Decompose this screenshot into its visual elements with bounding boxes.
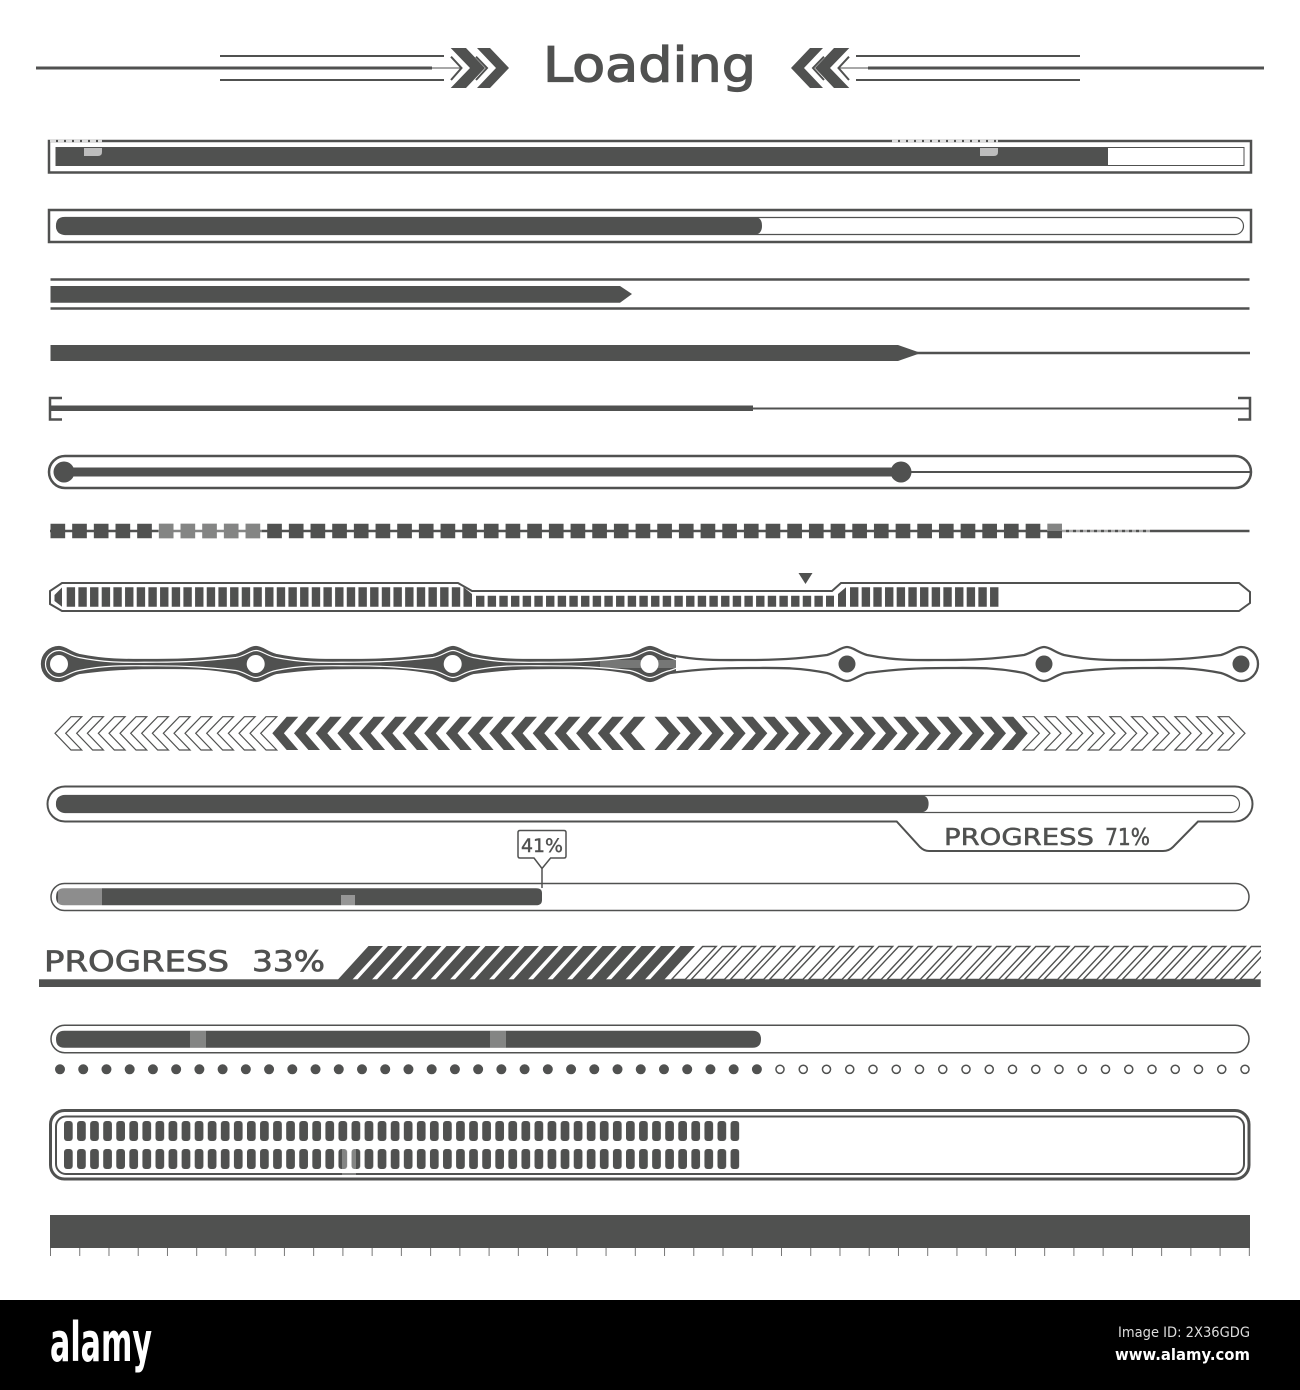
progress bar 6: capsule with round knobs (49, 456, 1251, 488)
progress bar 4: tapered bar on line (50, 345, 1250, 361)
progress bar 1: rectangular frame (49, 141, 1251, 172)
progress bar 7: square beads on line (50, 524, 1250, 538)
progress bar 15: double frame with two rows of pills (50, 1110, 1249, 1179)
progress bar 9: node chain (42, 647, 1258, 681)
tab label: 71% (1105, 824, 1150, 851)
dot row filled (60, 1064, 758, 1074)
dot row outlined (780, 1065, 1246, 1074)
progress bar 13: label and hatched stripes (39, 946, 1285, 987)
tab label: PROGRESS (944, 824, 1094, 851)
progress bar 16: solid bar with ruler ticks (50, 1215, 1250, 1252)
footer strip (0, 1300, 1300, 1390)
marker triangle (798, 573, 812, 584)
progress bar 11: capsule with tab (48, 786, 1253, 851)
progress bar 5: line with brackets (50, 398, 1250, 420)
stripe label (44, 946, 325, 978)
progress bar 3: arrow between rails (50, 280, 1250, 308)
stripe label: 33% (252, 946, 325, 978)
header: right arrow lines and chevrons (791, 48, 1264, 88)
progress bar 10: right-pointing chevrons (654, 717, 1245, 750)
footer image id: Image ID: 2X36GDG (1118, 1325, 1250, 1341)
progress bar 8: stepped HUD frame with ticks (50, 573, 1250, 611)
callout 41%: 41% (521, 835, 563, 857)
title: Loading (543, 38, 756, 94)
stripe label: PROGRESS (44, 946, 229, 978)
progress bar 10: left-pointing chevrons (55, 717, 646, 750)
progress bar 12: pill with callout (51, 830, 1249, 910)
header: left arrow lines and chevrons (36, 48, 509, 88)
footer logo: alamy (50, 1311, 152, 1374)
progress bar 14: pill with dot row (51, 1025, 1249, 1069)
callout 41% (518, 830, 566, 888)
tab label (944, 824, 1150, 851)
footer url: www.alamy.com (1115, 1345, 1250, 1364)
progress bar 2: frame with pill (49, 210, 1251, 242)
